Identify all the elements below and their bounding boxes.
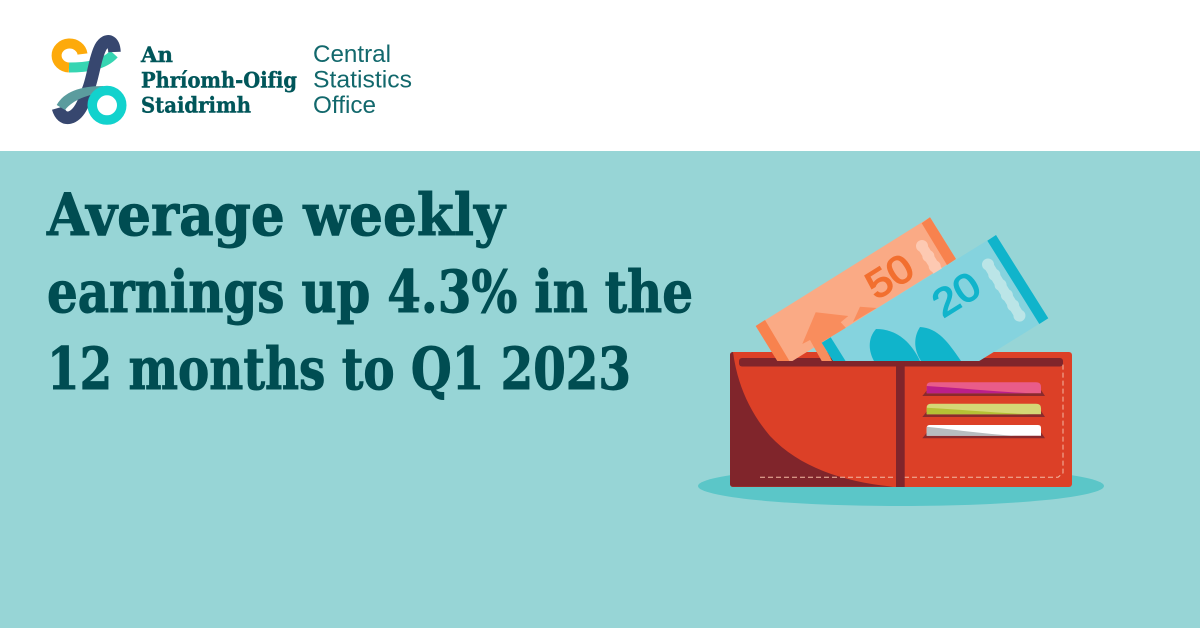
banknote: 20: 20 xyxy=(925,264,988,326)
wallet illustration xyxy=(698,217,1104,506)
header band with logo xyxy=(0,0,1200,151)
wallet inner slot xyxy=(739,358,1063,366)
logo text: English name xyxy=(313,41,412,119)
wallet body xyxy=(730,352,1072,487)
ground shadow xyxy=(698,466,1104,506)
wallet flap shadow xyxy=(730,352,893,487)
logo text: English name: Statistics xyxy=(313,66,412,94)
logo text: Irish name: Phríomh-Oifig xyxy=(141,68,297,94)
card slot: white xyxy=(922,425,1045,438)
title: 12 months to Q1 2023 xyxy=(47,335,631,403)
title: Average weekly xyxy=(46,181,507,249)
banknote: 50 xyxy=(756,217,956,368)
banknote: 20 xyxy=(822,235,1048,361)
stitching xyxy=(760,363,1063,477)
logo text: Irish name: An xyxy=(140,43,173,68)
banknote: 50: 50 xyxy=(858,246,922,308)
logo mark xyxy=(57,41,122,120)
logo text: Irish name xyxy=(140,43,297,118)
title: earnings up 4.3% in the xyxy=(47,258,693,326)
wallet front slot edge xyxy=(776,361,982,366)
card slot: pink xyxy=(922,382,1045,396)
logo text: Irish name: Staidrimh xyxy=(141,94,251,118)
centre strap xyxy=(896,362,905,487)
title xyxy=(46,181,693,403)
logo text: English name: Office xyxy=(313,92,376,119)
logo text: English name: Central xyxy=(313,41,391,68)
card slot: green xyxy=(922,404,1045,417)
